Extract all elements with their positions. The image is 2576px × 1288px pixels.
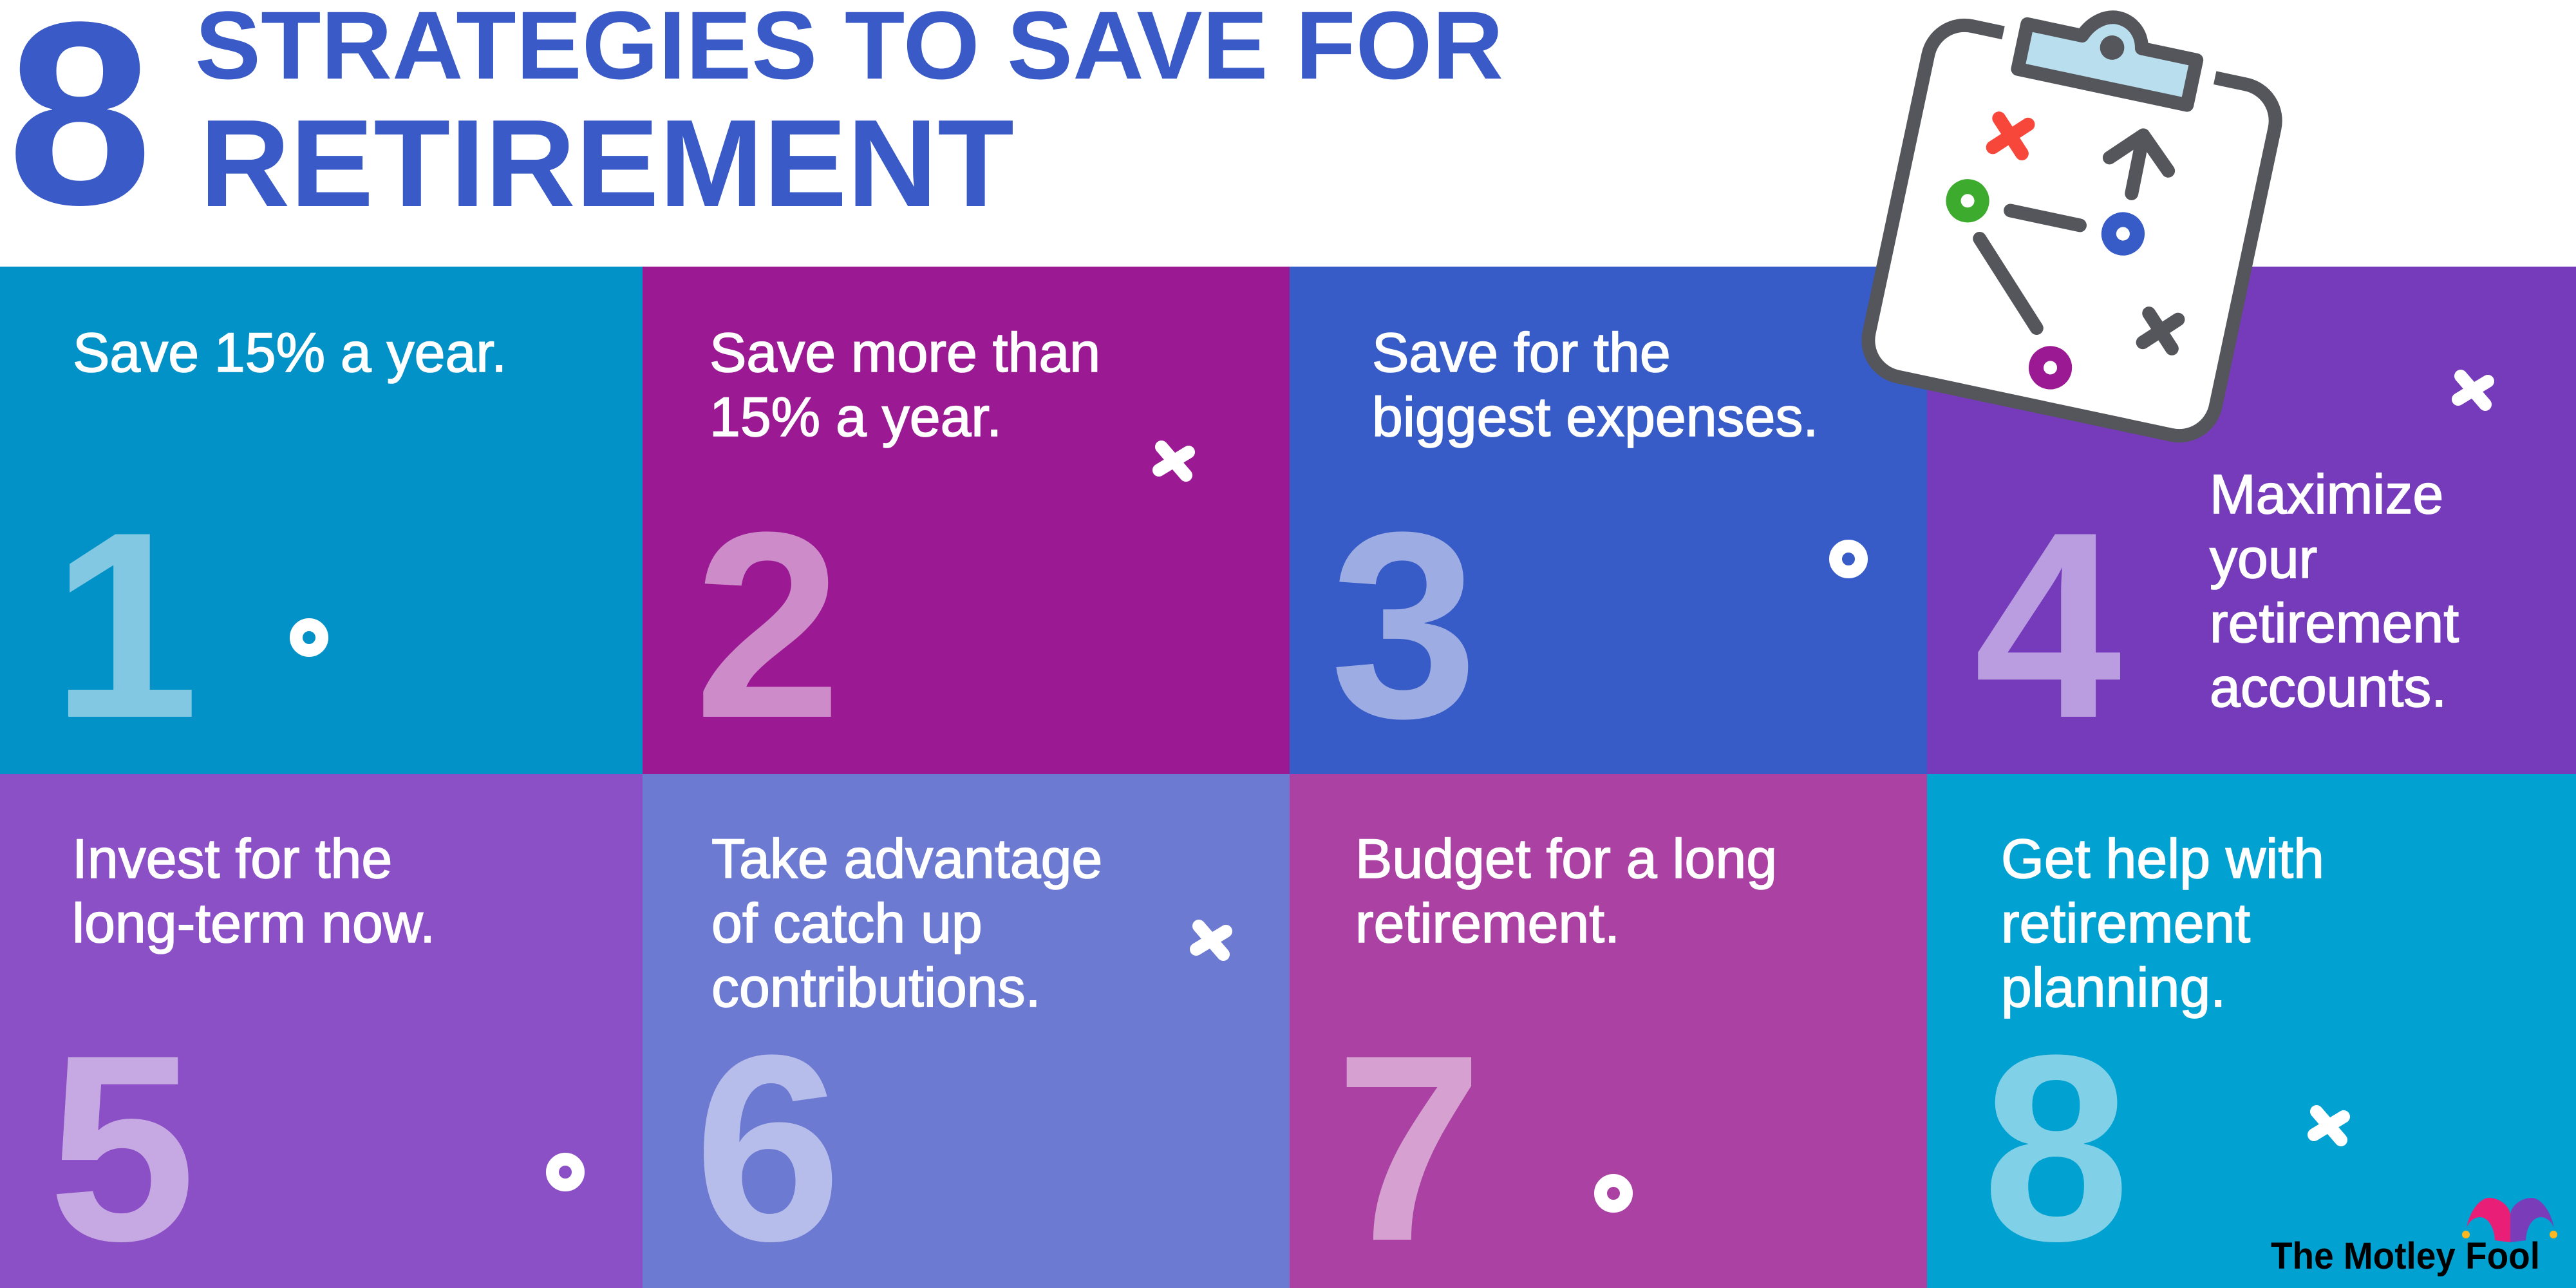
panel 4: Maximize: [2210, 464, 2443, 526]
panel 2: [643, 267, 1290, 774]
panel 1: 1: [52, 477, 199, 773]
title: RETIREMENT: [200, 93, 1014, 232]
panel 7: [1290, 774, 1927, 1288]
panel 8: planning.: [2001, 957, 2226, 1019]
panel 3: [1290, 267, 1927, 774]
panel 6: contributions.: [711, 957, 1041, 1019]
panel 5: long-term now.: [72, 893, 435, 954]
panel 5: [0, 774, 643, 1288]
icon: clipboard: [1861, 0, 2290, 442]
panel 2: 2: [694, 477, 841, 773]
decorative circles and x marks: [296, 376, 2488, 1206]
panel 8: [1927, 774, 2576, 1288]
panel 3: 3: [1330, 477, 1478, 773]
panel 5: Invest for the: [72, 828, 392, 890]
panel 6: Take advantage: [711, 828, 1102, 890]
panel 1: [0, 267, 643, 774]
panel 6: 6: [694, 1000, 841, 1288]
panel 2: Save more than: [710, 322, 1100, 384]
panel 4: 4: [1974, 477, 2123, 773]
panel 7: retirement.: [1355, 893, 1620, 954]
panel 4: your: [2210, 528, 2317, 590]
panel 1: Save 15% a year.: [73, 322, 507, 384]
panel 8: retirement: [2001, 893, 2250, 954]
panel 8: Get help with: [2001, 828, 2324, 890]
title: [7, 0, 1503, 259]
panel 7: Budget for a long: [1355, 828, 1777, 890]
panel 2: 15% a year.: [710, 386, 1002, 448]
panel 4: retirement: [2210, 592, 2459, 654]
logo: The Motley Fool: The Motley Fool: [2271, 1235, 2540, 1277]
panel 6: of catch up: [711, 893, 982, 954]
panel 4: [1927, 267, 2576, 774]
panel 5: 5: [48, 1000, 196, 1288]
panel 3: biggest expenses.: [1372, 386, 1818, 448]
panel 7: 7: [1335, 1000, 1483, 1288]
panel 3: Save for the: [1372, 322, 1671, 384]
panel 4: accounts.: [2210, 657, 2447, 719]
panel 6: [643, 774, 1290, 1288]
logo: The Motley Fool: [2271, 1198, 2557, 1277]
panel 8: 8: [1982, 1000, 2130, 1288]
